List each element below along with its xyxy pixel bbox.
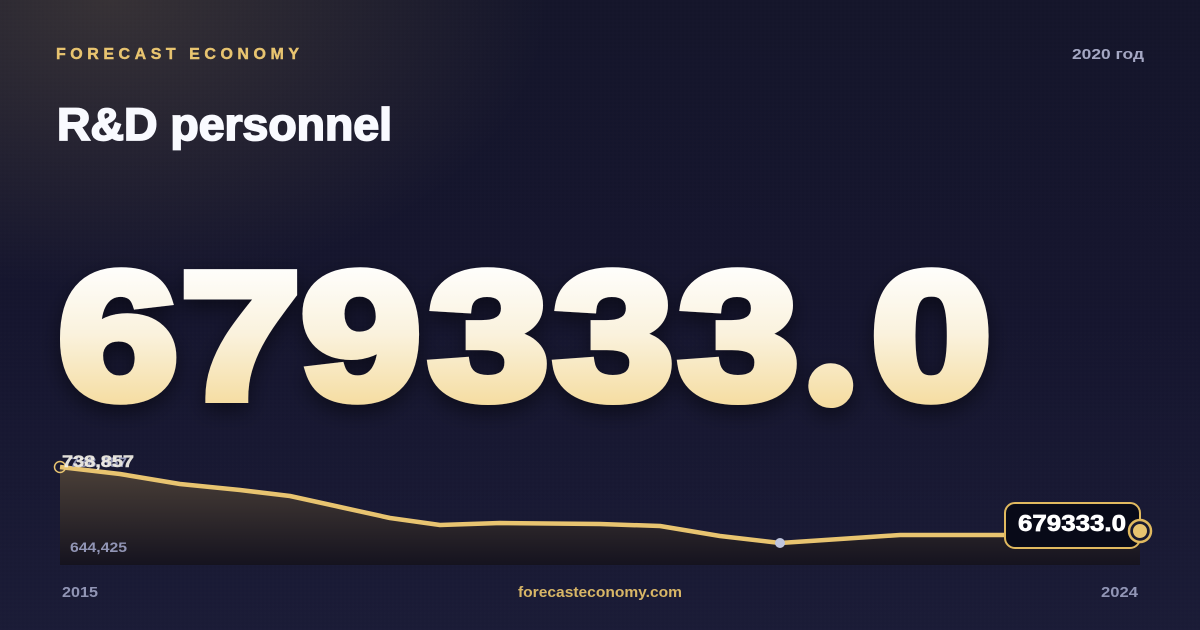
trend line xyxy=(60,467,1140,543)
maximum marker xyxy=(54,462,66,472)
main value: 3 xyxy=(553,236,674,437)
current point marker xyxy=(1129,520,1151,542)
brand label: FORECAST ECONOMY xyxy=(56,46,299,63)
title: R&D personnel xyxy=(57,99,392,150)
main value: 7 xyxy=(180,236,301,437)
maximum value: 738,857 xyxy=(62,452,134,471)
main value: . xyxy=(804,208,858,447)
year label: 2020 год xyxy=(1072,46,1145,63)
minimum value: 644,425 xyxy=(70,539,127,555)
area under line xyxy=(60,467,1140,565)
main value xyxy=(58,208,991,447)
start year: 2015 xyxy=(62,584,98,601)
minimum marker xyxy=(775,538,785,548)
current value callout: 679333.0 xyxy=(1018,510,1126,536)
current value callout xyxy=(1005,503,1140,548)
maximum value muted: 738,857 xyxy=(70,454,127,470)
website: forecasteconomy.com xyxy=(518,584,682,601)
main value: 6 xyxy=(58,236,178,437)
main value: 0 xyxy=(871,236,991,437)
main value: 3 xyxy=(429,236,549,437)
sparkline chart xyxy=(54,452,1151,565)
main value: 3 xyxy=(678,236,799,437)
end year: 2024 xyxy=(1101,584,1139,601)
main value: 9 xyxy=(301,236,421,437)
